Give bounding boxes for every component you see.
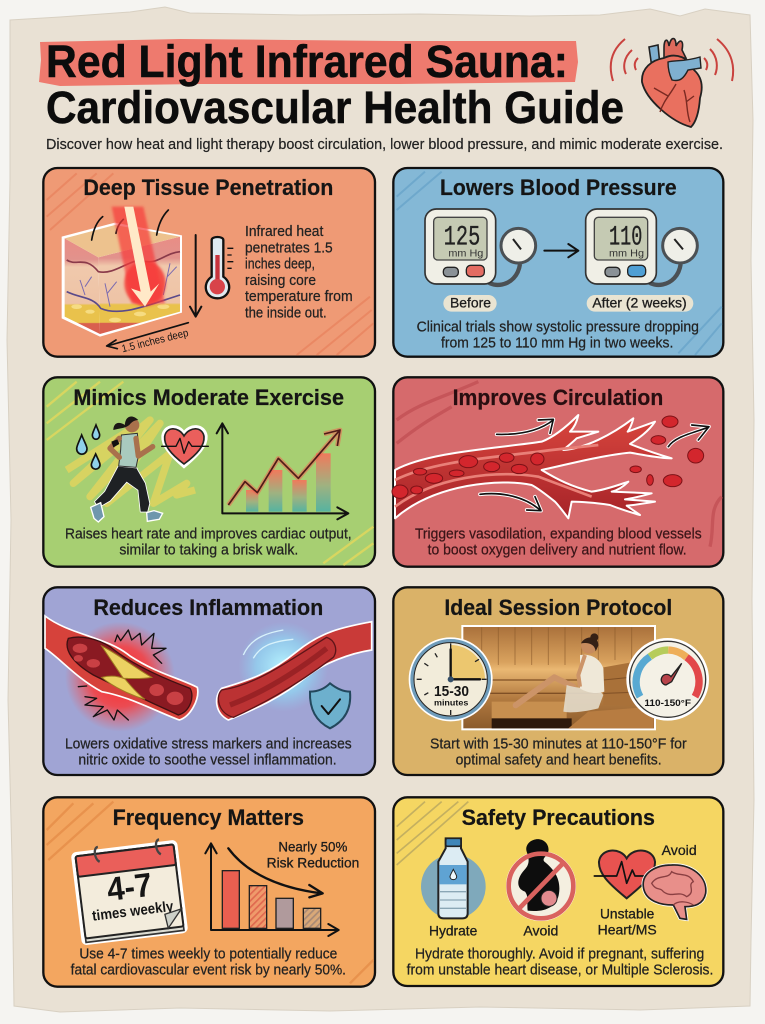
- text: description: temperature from: [245, 289, 353, 305]
- panel: mimics moderate exercise: [43, 377, 375, 567]
- illustration: before monitor: mm Hg: [448, 249, 483, 260]
- label: risk reduction: [267, 839, 359, 870]
- illustration: healthy vessel: [217, 622, 372, 720]
- text: description: penetrates 1.5: [245, 240, 333, 256]
- yellow scribble: [67, 420, 195, 503]
- heading: Ideal Session Protocol: [444, 595, 672, 620]
- text: description: Infrared heat: [245, 224, 323, 240]
- icon: temperature gauge: [628, 639, 708, 719]
- hatch marks: [397, 172, 722, 355]
- hatch marks: [47, 802, 373, 983]
- icon: calendar 4-7 times weekly: [73, 838, 185, 943]
- icon: heart with ECG: [162, 427, 208, 466]
- icon: calendar 4-7 times weekly: times weekly: [91, 899, 175, 925]
- text: description: [417, 320, 699, 352]
- panel background: [393, 168, 723, 357]
- text: description: from 125 to 110 mm Hg in two weeks.: [441, 336, 673, 352]
- arrow: before to after: [544, 244, 578, 257]
- icon: anatomical heart with pulse waves: [611, 38, 733, 127]
- panel: reduces inflammation: [43, 587, 375, 775]
- illustration: inflamed vessel: [45, 616, 198, 732]
- text: description: [415, 526, 702, 558]
- text: description: Use 4-7 times weekly to potentially reduce: [79, 946, 337, 962]
- panel background: [393, 797, 723, 986]
- label: risk reduction: Nearly 50%: [278, 839, 347, 855]
- text: description: Start with 15-30 minutes at 110-150°F for: [430, 736, 687, 752]
- icon: clock 15-30 minutes: minutes: [434, 697, 469, 707]
- subtitle: Discover how heat and light therapy boost circulation, lower blood pressure, and mimic moderate exercise.: [46, 136, 723, 153]
- texture strokes: [397, 382, 722, 547]
- title: [46, 36, 624, 133]
- text: description: optimal safety and heart benefits.: [456, 752, 662, 768]
- heading: Safety Precautions: [462, 805, 655, 830]
- label: risk reduction: Risk Reduction: [267, 854, 359, 870]
- label: unstable heart / MS: [598, 905, 657, 937]
- text: description: fatal cardiovascular event risk by nearly 50%.: [71, 962, 346, 978]
- arrows: blood flow: [480, 419, 709, 511]
- panel background: [43, 377, 375, 567]
- panel background: [393, 377, 723, 567]
- panel: safety precautions: [393, 797, 723, 986]
- icon: water bottle: [421, 838, 486, 919]
- text: description: Raises heart rate and improves cardiac output,: [65, 526, 352, 542]
- icon: temperature gauge: 110-150°F: [644, 698, 692, 708]
- text: description: Lowers oxidative stress markers and increases: [65, 736, 352, 752]
- icon: clock 15-30 minutes: [410, 639, 491, 720]
- illustration: skin cross-section with infrared beam: [62, 207, 182, 337]
- icon: calendar 4-7 times weekly: 4-7: [105, 867, 154, 909]
- heading: Lowers Blood Pressure: [440, 175, 677, 200]
- label: avoid pregnancy: Avoid: [523, 922, 558, 938]
- label: unstable heart / MS: Heart/MS: [598, 921, 657, 937]
- title highlight brush: [39, 39, 578, 86]
- panel: lowers blood pressure: [393, 168, 723, 357]
- text: description: from unstable heart disease, or Multiple Sclerosis.: [407, 962, 713, 978]
- illustration: sauna photo: [462, 626, 655, 729]
- text: description: raising core: [245, 273, 316, 289]
- title: Red Light Infrared Sauna:: [46, 36, 568, 87]
- illustration: after monitor: 110: [609, 222, 642, 253]
- heading: Mimics Moderate Exercise: [73, 385, 344, 410]
- icon: no pregnancy sign: [508, 839, 574, 919]
- icon: thermometer: [206, 237, 233, 298]
- text: description: inches deep,: [245, 256, 315, 272]
- text: description: similar to taking a brisk walk.: [119, 542, 298, 558]
- illustration: after monitor: mm Hg: [609, 249, 644, 260]
- bar chart: [205, 843, 339, 936]
- panel: ideal session protocol: [393, 587, 723, 775]
- illustration: before monitor: 125: [444, 222, 480, 253]
- heading: Deep Tissue Penetration: [83, 175, 333, 200]
- text: description: the inside out.: [245, 306, 327, 322]
- heading: Improves Circulation: [453, 385, 663, 410]
- panel: deep tissue penetration: [43, 168, 375, 357]
- heading: Frequency Matters: [113, 805, 304, 830]
- text: description: Triggers vasodilation, expanding blood vessels: [415, 526, 702, 542]
- text: description: Hydrate thoroughly. Avoid if pregnant, suffering: [415, 946, 704, 962]
- line chart: [217, 423, 348, 519]
- icon: check shield: [310, 683, 350, 728]
- text: description: [407, 946, 713, 978]
- arrow: depth: [190, 235, 201, 317]
- heading: Reduces Inflammation: [93, 595, 323, 620]
- label: before: Before: [450, 294, 491, 310]
- illustration: before monitor: [425, 209, 536, 285]
- text: description: Clinical trials show systolic pressure dropping: [417, 320, 699, 336]
- panel background: [393, 587, 723, 775]
- panel background: [43, 587, 375, 775]
- icon: sweat drops: [77, 425, 100, 469]
- text: description: [430, 736, 687, 768]
- panel: improves circulation: [392, 377, 723, 567]
- header: [39, 36, 733, 153]
- panel background: [43, 797, 375, 987]
- illustration: blood vessel branching: [392, 415, 704, 518]
- illustration: runner: [91, 416, 163, 522]
- hatch marks: [47, 173, 373, 355]
- text: description: to boost oxygen delivery and nutrient flow.: [428, 542, 687, 558]
- panel: frequency matters: [43, 797, 375, 987]
- text: description: [71, 946, 346, 978]
- icon: clock 15-30 minutes: 15-30: [434, 684, 469, 700]
- text: description: [65, 526, 352, 558]
- text: description: nitric oxide to soothe vessel inflammation.: [78, 752, 337, 768]
- illustration: after monitor: [586, 209, 697, 285]
- hatch marks: [397, 802, 468, 865]
- panel background: [43, 168, 375, 357]
- label: avoid: Avoid: [662, 842, 697, 858]
- label: hydrate: Hydrate: [429, 922, 478, 938]
- title: Cardiovascular Health Guide: [46, 82, 624, 133]
- label: after: After (2 weeks): [592, 294, 687, 310]
- depth label with arrow: 1.5 inches deep: [120, 327, 190, 355]
- label: unstable heart / MS: Unstable: [600, 905, 655, 921]
- text: description: [65, 736, 352, 768]
- text: description: [245, 224, 353, 322]
- icon: brain: [643, 865, 706, 919]
- icon: heart with ECG: [594, 851, 655, 898]
- hatch marks: [47, 382, 373, 565]
